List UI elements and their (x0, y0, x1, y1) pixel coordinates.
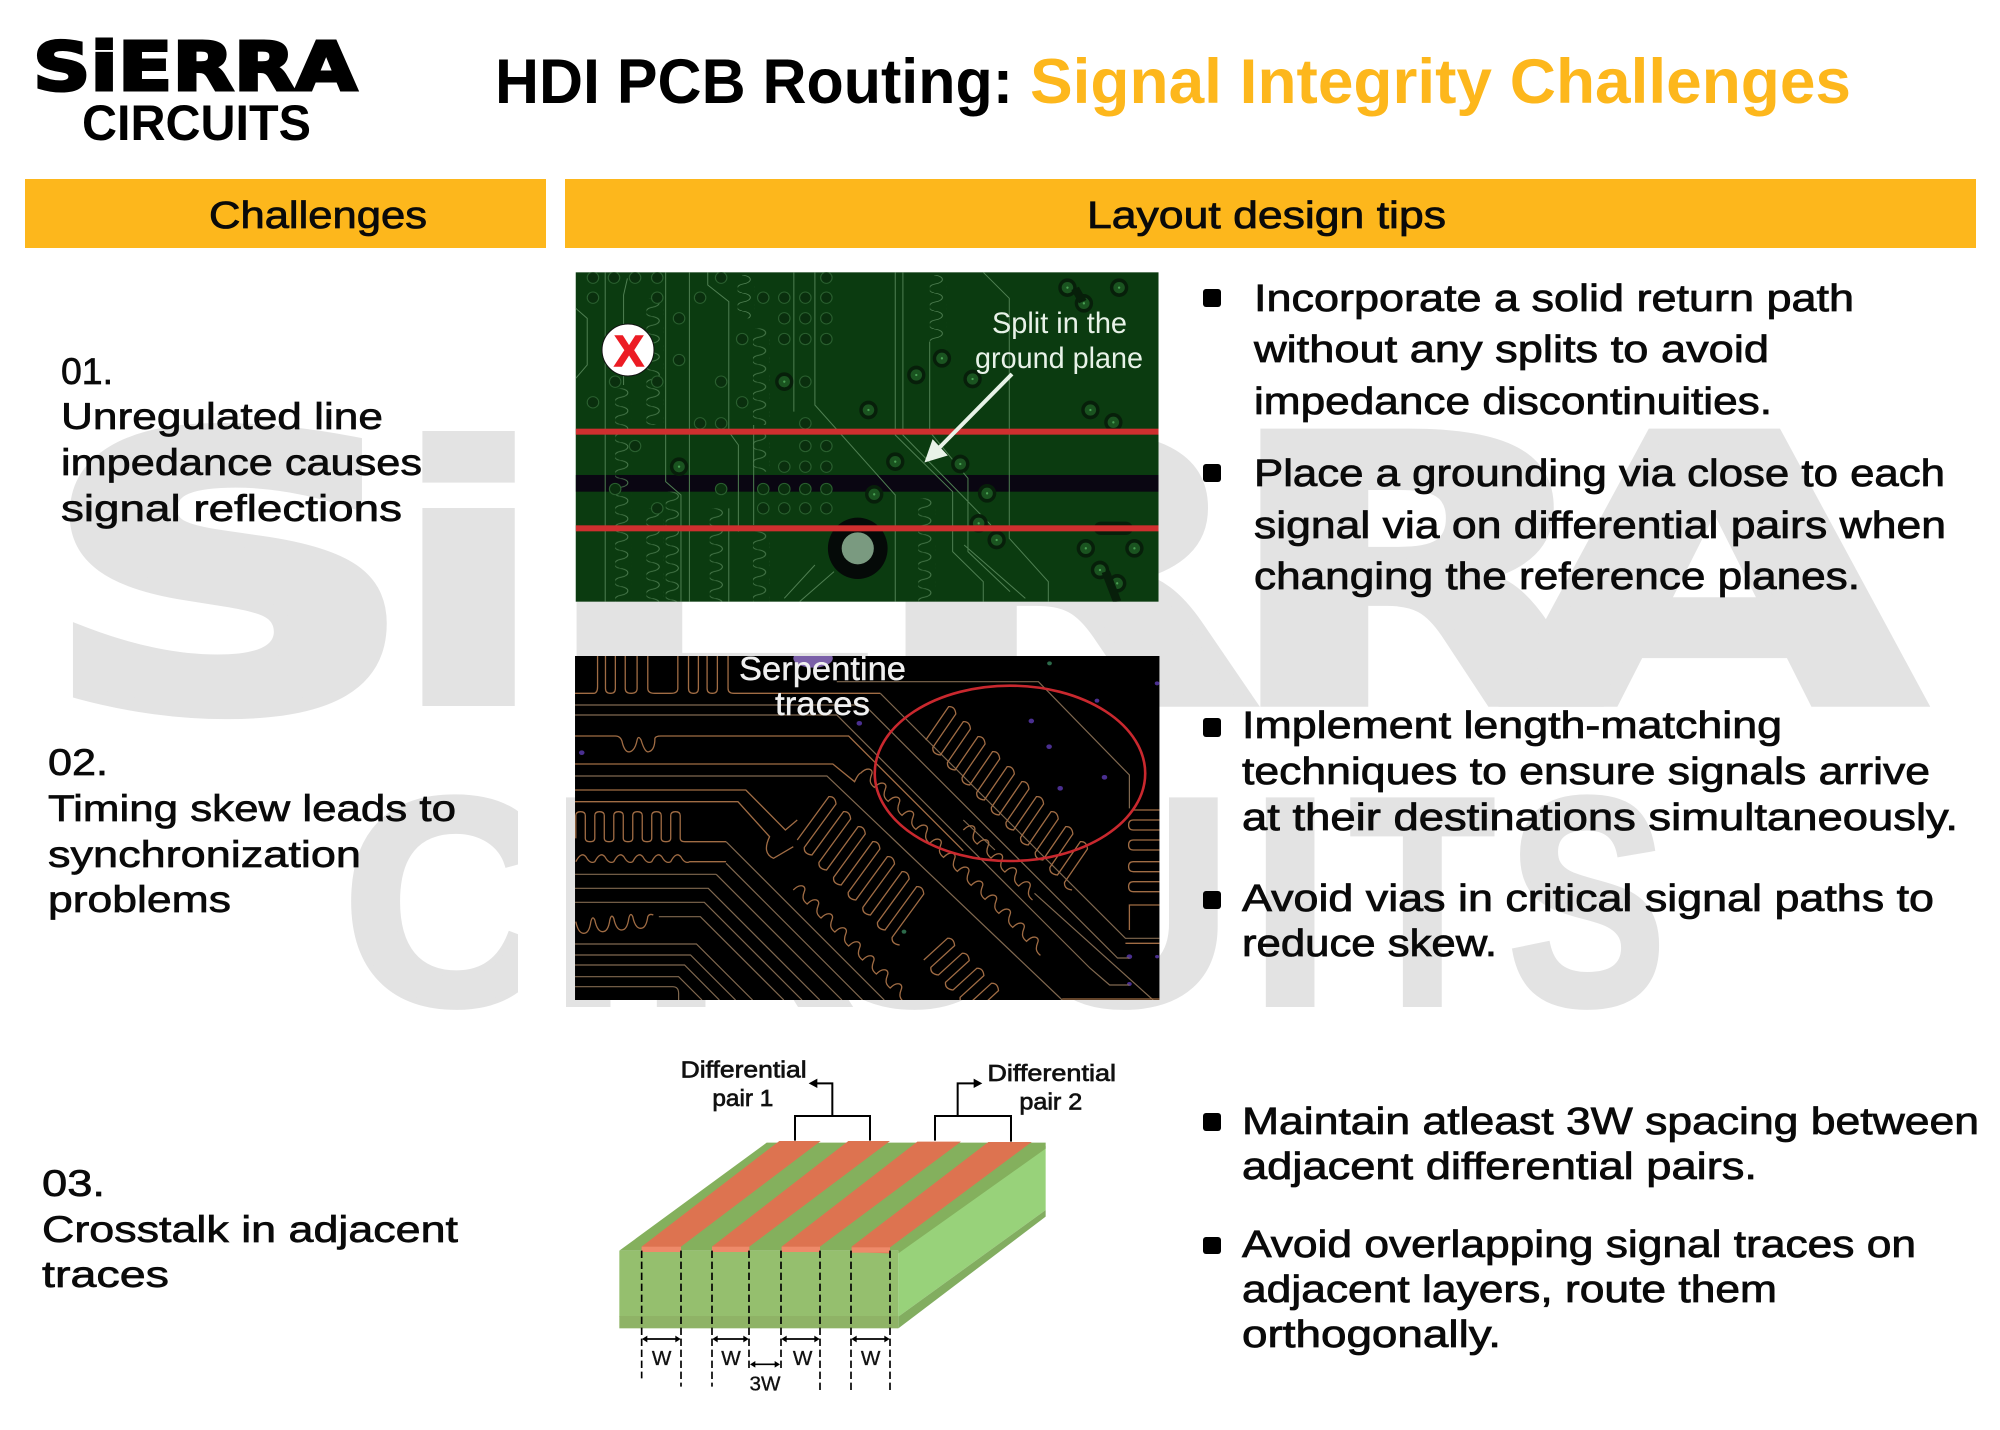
background watermark: CIRCUI (342, 736, 1331, 1067)
width labels: W (861, 1347, 881, 1370)
arrow: to split (926, 374, 1012, 461)
challenge 03 text (42, 1163, 459, 1295)
tips for challenge 02: Implement length-matching (1242, 705, 1782, 747)
width labels: W (793, 1347, 813, 1370)
tips for challenge 03: orthogonally. (1242, 1314, 1501, 1356)
tips for challenge 02: techniques to ensure signals arrive (1242, 751, 1930, 793)
diagram: differential pair cross-section (619, 1056, 1116, 1396)
tips for challenge 03: Maintain atleast 3W spacing between (1242, 1101, 1979, 1143)
label: serpentine traces (739, 650, 906, 722)
label: split in the ground plane: ground plane (975, 342, 1143, 375)
tips for challenge 01: signal via on differential pairs when (1254, 505, 1946, 547)
challenge 03 text: Crosstalk in adjacent (42, 1209, 459, 1250)
tips for challenge 01 (1203, 278, 1946, 598)
challenge 02 text: problems (48, 879, 231, 920)
label: split in the ground plane (975, 307, 1143, 375)
challenge 03 text: 03. (42, 1163, 105, 1204)
label: serpentine traces: traces (775, 685, 870, 722)
label: differential pair 1: Differential (681, 1056, 807, 1082)
tips for challenge 02: at their destinations simultaneously. (1242, 797, 1958, 839)
background watermark: T (1350, 736, 1495, 1067)
header: Challenges: Challenges (209, 195, 427, 237)
tips for challenge 03: Avoid overlapping signal traces on (1242, 1224, 1916, 1266)
background watermark: R (1223, 362, 1601, 788)
tips for challenge 03: adjacent layers, route them (1242, 1269, 1777, 1311)
tips for challenge 01: Incorporate a solid return path (1254, 278, 1854, 320)
tips for challenge 03 (1203, 1101, 1979, 1356)
trace edges (642, 1247, 890, 1253)
logo: Sierra Circuits (33, 28, 357, 151)
tips for challenge 02: reduce skew. (1242, 923, 1497, 965)
width arrows (642, 1336, 890, 1368)
challenge 01 text: impedance causes (61, 442, 422, 483)
dashed width guides (642, 1251, 890, 1390)
background watermark: S (42, 361, 415, 795)
logo: Sierra Circuits: SiERRA (33, 28, 357, 106)
background watermark: E (525, 354, 909, 797)
width labels: W (721, 1347, 741, 1370)
tips for challenge 02: Avoid vias in critical signal paths to (1242, 878, 1934, 920)
header: Layout design tips: Layout design tips (1087, 195, 1446, 237)
challenge 01 text: signal reflections (61, 488, 402, 529)
label: differential pair 2: pair 2 (1019, 1088, 1082, 1114)
header: Challenges (25, 179, 546, 248)
label: split in the ground plane: Split in the (992, 307, 1127, 340)
tips for challenge 01: without any splits to avoid (1253, 329, 1769, 371)
image: serpentine traces PCB (575, 649, 1159, 1020)
pair 1 bracket (795, 1079, 870, 1141)
width labels: 3W (750, 1373, 781, 1396)
challenge 01 text: Unregulated line (61, 396, 383, 437)
tips for challenge 01: Place a grounding via close to each (1254, 453, 1945, 495)
background watermark: S (1508, 736, 1666, 1067)
width labels: W (652, 1347, 672, 1370)
tips for challenge 01: impedance discontinuities. (1254, 381, 1772, 423)
title: Signal Integrity Challenges (1030, 47, 1851, 117)
background watermark: A (1508, 362, 1925, 787)
copper traces (642, 1141, 1032, 1253)
title (495, 47, 1851, 117)
label: differential pair 1: pair 1 (712, 1085, 773, 1111)
tips for challenge 02 (1203, 705, 1958, 965)
label: serpentine traces: Serpentine (739, 650, 906, 687)
icon: red X marker: X (614, 327, 644, 376)
challenge 02 text: 02. (48, 742, 108, 783)
icon: red X marker (602, 324, 654, 376)
tips for challenge 01: changing the reference planes. (1254, 556, 1860, 598)
label: differential pair 2: Differential (987, 1060, 1116, 1086)
tips for challenge 03: adjacent differential pairs. (1242, 1146, 1757, 1188)
background watermark (42, 354, 1925, 1067)
challenge 01 text: 01. (61, 351, 113, 392)
logo: Sierra Circuits: CIRCUITS (82, 95, 311, 151)
background watermark: i (378, 370, 559, 792)
image: split in the ground plane PCB (576, 272, 1159, 602)
label: differential pair 1 (681, 1056, 807, 1111)
background watermark: R (867, 362, 1257, 788)
label: differential pair 2 (987, 1060, 1116, 1114)
challenge 02 text: Timing skew leads to (48, 788, 456, 829)
width labels (652, 1347, 881, 1396)
challenge 02 text: synchronization (48, 834, 361, 875)
challenge 02 text (48, 742, 456, 920)
challenge 03 text: traces (42, 1254, 169, 1295)
board body (619, 1143, 1046, 1328)
header: Layout design tips (565, 179, 1976, 248)
title: HDI PCB Routing: (495, 47, 1013, 117)
pair 2 bracket (935, 1079, 1011, 1142)
challenge 01 text (61, 351, 422, 529)
